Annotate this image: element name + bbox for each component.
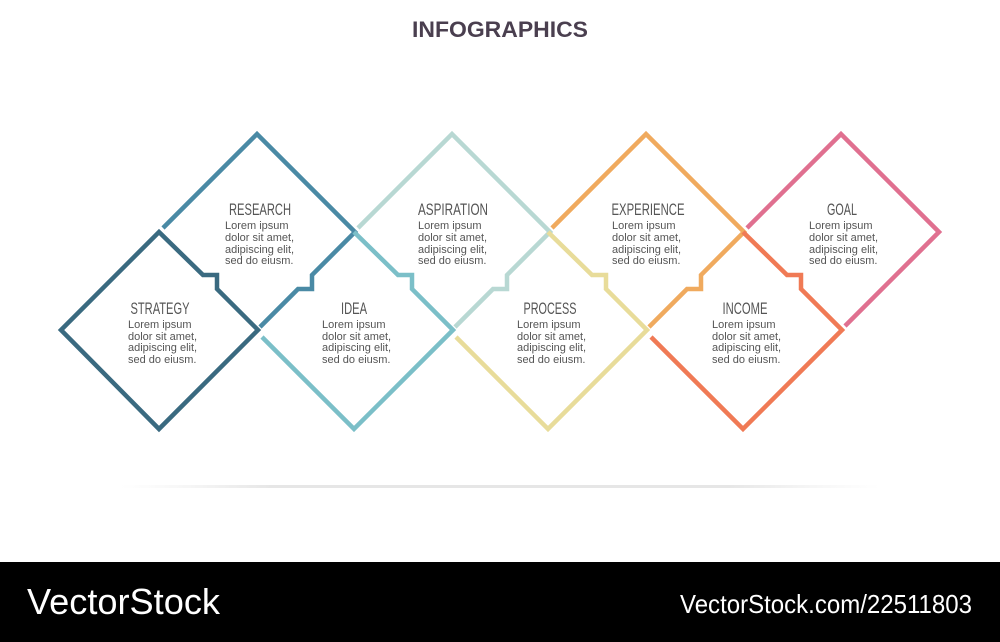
diamond: experience: dolor sit amet, (612, 232, 681, 244)
diamond: process: dolor sit amet, (517, 331, 586, 343)
diamond: experience: sed do eiusm. (612, 255, 680, 267)
diamond: research: sed do eiusm. (225, 255, 293, 267)
diamond: strategy: Lorem ipsum (128, 319, 192, 331)
diamond: idea: Lorem ipsum (322, 319, 386, 331)
footer band (0, 562, 1000, 642)
diamond: income: sed do eiusm. (712, 354, 780, 366)
diamond: aspiration: sed do eiusm. (418, 255, 486, 267)
diamond: income: adipiscing elit, (712, 342, 781, 354)
diamond: strategy: adipiscing elit, (128, 342, 197, 354)
shadow line (120, 485, 880, 488)
diamond: research: RESEARCH (229, 200, 291, 219)
diamond: income: INCOME (722, 299, 768, 318)
diamond: goal: dolor sit amet, (809, 232, 878, 244)
diamond: process: adipiscing elit, (517, 342, 586, 354)
diamond: experience: EXPERIENCE (612, 200, 684, 219)
diamond: experience (552, 134, 744, 327)
diamond: income (651, 232, 842, 429)
diamond: research: dolor sit amet, (225, 232, 294, 244)
diamond: income: dolor sit amet, (712, 331, 781, 343)
diamond: goal: adipiscing elit, (809, 244, 878, 256)
diamond: strategy: dolor sit amet, (128, 331, 197, 343)
diamond: goal: Lorem ipsum (809, 220, 873, 232)
diamond: income: Lorem ipsum (712, 319, 776, 331)
diamond: idea (262, 232, 453, 429)
diamond: idea: adipiscing elit, (322, 342, 391, 354)
diamond: research: Lorem ipsum (225, 220, 289, 232)
diamond: research: adipiscing elit, (225, 244, 294, 256)
footer band: VectorStock (27, 581, 221, 622)
diamond: experience: Lorem ipsum (612, 220, 676, 232)
footer band: VectorStock.com/22511803 (680, 589, 972, 619)
diamond: aspiration: adipiscing elit, (418, 244, 487, 256)
diamond: process: Lorem ipsum (517, 319, 581, 331)
diamond: goal: sed do eiusm. (809, 255, 877, 267)
diamond: idea: dolor sit amet, (322, 331, 391, 343)
diamond: goal: GOAL (827, 200, 857, 219)
diamond: aspiration: ASPIRATION (418, 200, 488, 219)
diamond: process: PROCESS (524, 299, 576, 318)
diamond: goal (747, 134, 939, 326)
diamond: strategy: STRATEGY (130, 299, 190, 318)
diamond: strategy: sed do eiusm. (128, 354, 196, 366)
diagram (61, 134, 939, 429)
diamond: aspiration: dolor sit amet, (418, 232, 487, 244)
diamond: idea: sed do eiusm. (322, 354, 390, 366)
diamond: idea: IDEA (341, 299, 367, 318)
diamond: strategy (61, 232, 258, 429)
diamond: process: sed do eiusm. (517, 354, 585, 366)
title: INFOGRAPHICS (412, 17, 588, 42)
diamond: process (456, 232, 647, 429)
diamond: aspiration: Lorem ipsum (418, 220, 482, 232)
diamond: aspiration (358, 134, 550, 327)
diamond: experience: adipiscing elit, (612, 244, 681, 256)
diamond: research (163, 134, 355, 327)
